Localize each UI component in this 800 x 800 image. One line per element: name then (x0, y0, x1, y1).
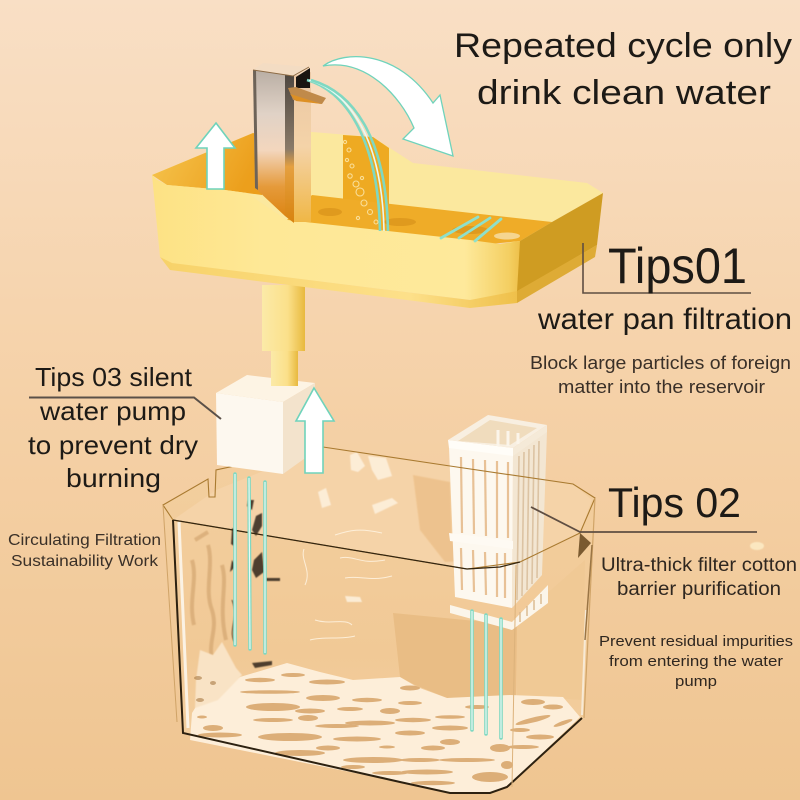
tank wall shade right (517, 560, 585, 700)
tank outline (163, 447, 595, 793)
tank body (163, 447, 595, 793)
note: circulating filtration (8, 532, 161, 570)
title: Repeated cycle only (454, 27, 792, 65)
note: circulating filtration: Sustainability Work (11, 553, 159, 570)
filter basket (448, 415, 548, 630)
tank left wall ripples (192, 532, 226, 660)
arrow: left up (196, 123, 235, 189)
faucet dark band (285, 75, 294, 223)
note: circulating filtration: Circulating Filtration (8, 532, 161, 549)
title (454, 27, 792, 112)
tank dark refractions (230, 500, 280, 668)
callout: Tips 02: Prevent residual impurities (599, 633, 793, 650)
faucet lip (288, 87, 326, 104)
tank fine highlights (303, 530, 392, 640)
callout: Tips01: water pan filtration (537, 303, 792, 336)
tank front rim dark line (173, 520, 520, 569)
tray back wall (152, 132, 603, 243)
floor ripples (197, 673, 573, 785)
callout: Tips 03: Tips 03 silent (35, 362, 193, 392)
faucet opening (296, 68, 310, 88)
sandy floor (190, 663, 580, 793)
basket front face (449, 447, 513, 608)
basket lower slots (520, 594, 541, 622)
callout: Tips 03: burning (66, 463, 161, 493)
basket front slots (461, 457, 508, 598)
callout: Tips01: Block large particles of foreign (530, 353, 791, 373)
tank shade: back panel (413, 475, 500, 562)
tray water specks (318, 208, 488, 234)
faucet dark edge (253, 70, 258, 190)
water pump (216, 345, 315, 474)
callout: Tips 02: from entering the water (609, 653, 783, 670)
crumpled highlight (195, 642, 242, 708)
callout: Tips01: Tips01 (608, 238, 747, 294)
tray front (152, 175, 520, 300)
tank water surface (173, 447, 592, 569)
pump side (283, 383, 315, 474)
arrow: curved (323, 57, 453, 156)
faucet right column (293, 72, 311, 222)
basket rim and interior (448, 415, 547, 448)
water bubbles (343, 140, 378, 224)
callout: Tips 03 (28, 362, 221, 493)
tray right side (517, 193, 603, 292)
callout: Tips 03: to prevent dry (28, 430, 198, 460)
basket lower part (450, 585, 548, 630)
tray lower band (160, 257, 517, 308)
tray left interior (152, 133, 262, 195)
callout: Tips01: matter into the reservoir (558, 377, 765, 397)
tray flow lines (441, 217, 501, 241)
basket right face (512, 431, 547, 608)
callout: Tips 02 (531, 479, 797, 690)
tray stem (262, 285, 305, 351)
basket right slots (517, 441, 539, 600)
callout: Tips 02: pump (675, 673, 717, 690)
teal flow lines: tank (235, 474, 501, 738)
callout: Tips 02: barrier purification (617, 579, 781, 600)
faucet (253, 63, 326, 223)
pump front (216, 393, 283, 474)
sparkle (750, 542, 764, 550)
basket band (449, 533, 513, 549)
tank highlights (318, 452, 398, 602)
tray water (287, 195, 552, 246)
faucet front (253, 70, 285, 216)
water tank (163, 447, 595, 793)
callout: Tips 02: Ultra-thick filter cotton (601, 555, 797, 576)
tray orange wall (343, 135, 389, 215)
callout: Tips 02: Tips 02 (608, 479, 741, 526)
teal water stream (307, 80, 388, 231)
tank right edges (584, 498, 595, 718)
pump top (216, 375, 315, 402)
arrow: pump up (296, 388, 334, 473)
tank rim (163, 447, 595, 569)
tank shade: submerged panel (393, 613, 517, 698)
pipe (271, 345, 298, 386)
faucet top (253, 63, 308, 76)
title: drink clean water (477, 74, 771, 112)
callout: Tips 03: water pump (39, 396, 186, 426)
tray lower band right (517, 245, 597, 303)
tank left edge (173, 520, 582, 793)
callout: Tips01 (530, 238, 792, 397)
tray outlet (494, 232, 520, 240)
water tray (152, 132, 603, 351)
